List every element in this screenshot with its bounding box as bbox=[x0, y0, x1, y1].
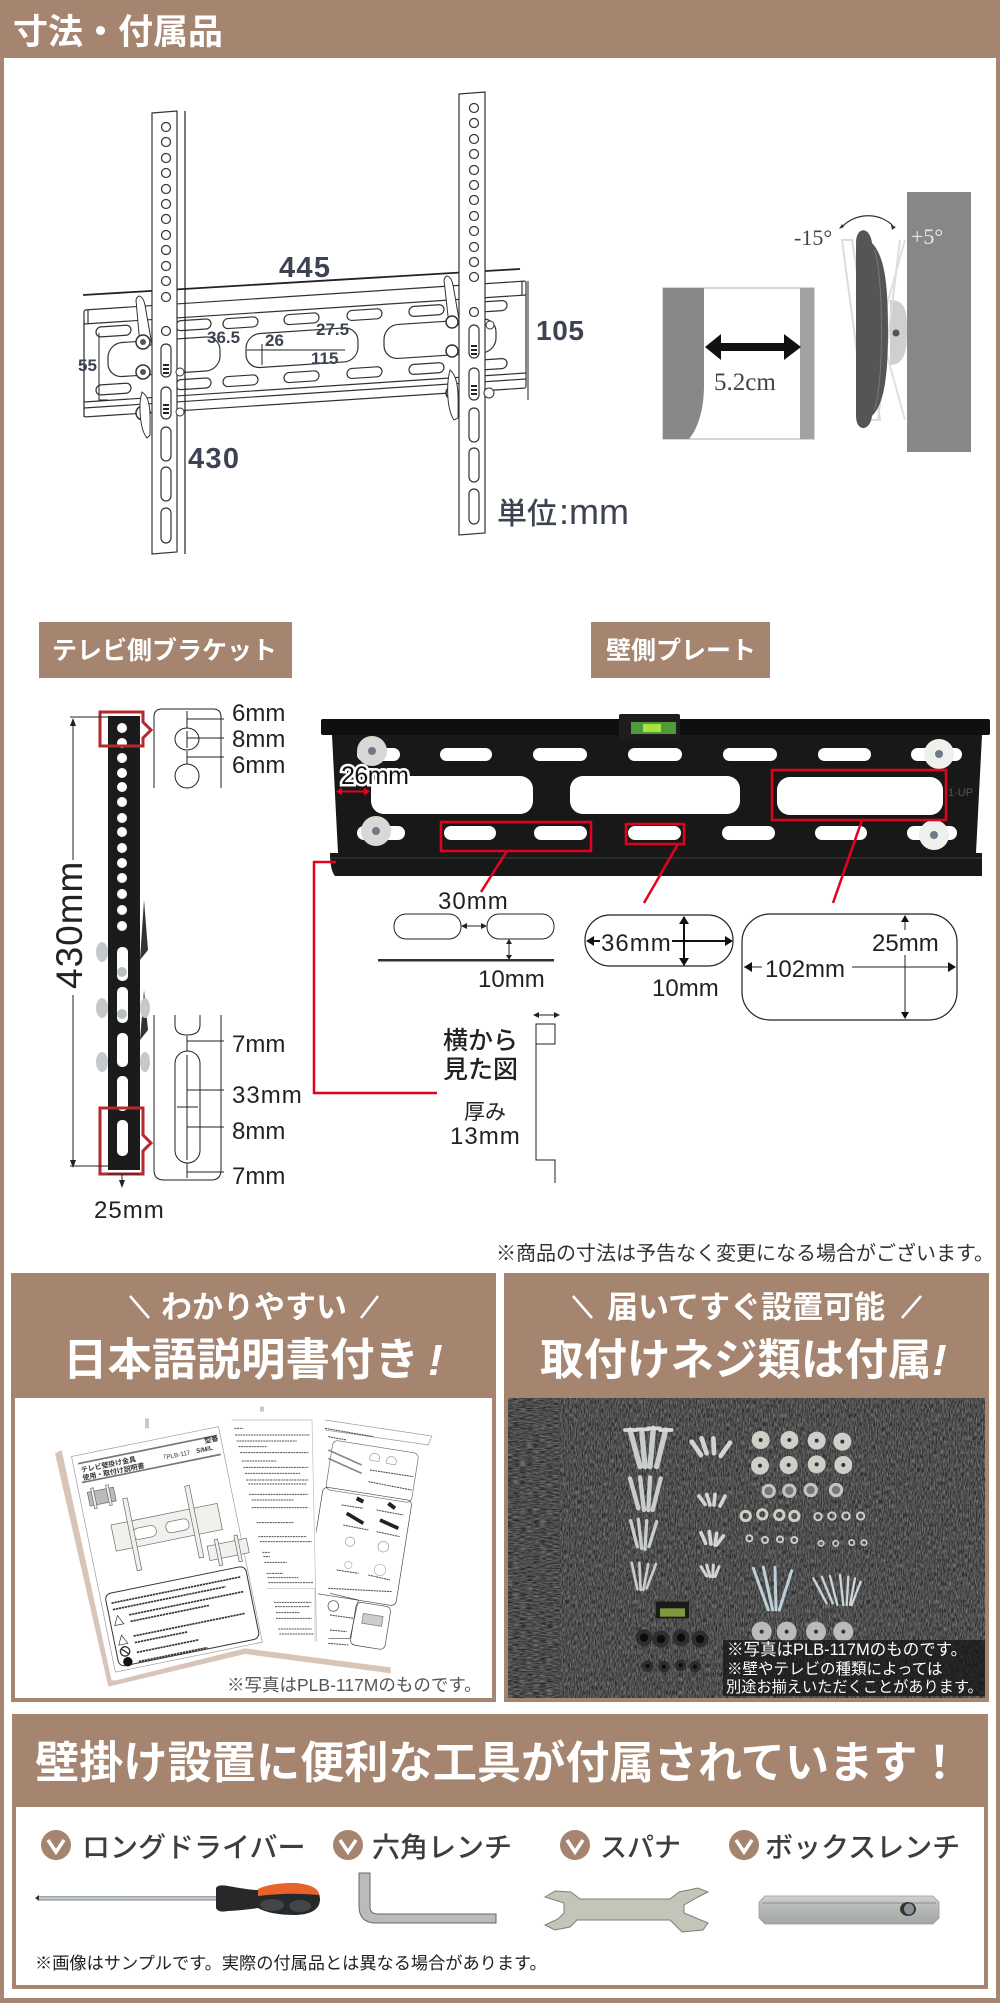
footnote: ※画像はサンプルです。実際の付属品とは異なる場合があります。 bbox=[35, 1953, 547, 1973]
manual pages illustration bbox=[55, 1407, 435, 1687]
TV-side bracket photo with dimensions: 430mm bbox=[49, 861, 90, 989]
side view: 厚み bbox=[464, 1101, 506, 1124]
bracket dimension labels: 7mm bbox=[232, 1031, 285, 1058]
photo notes bbox=[726, 1640, 983, 1696]
red highlight boxes and leaders bbox=[314, 770, 946, 1093]
heading 日本語説明書付き！: 日本語説明書付き bbox=[63, 1336, 419, 1385]
bracket dimension labels: 25mm bbox=[94, 1197, 165, 1224]
icon: spanner bbox=[545, 1888, 708, 1932]
bracket dimension labels bbox=[94, 700, 303, 1224]
right bracket bbox=[444, 92, 494, 535]
panel: screws included bbox=[504, 1273, 989, 1702]
side view: 見た図 bbox=[443, 1056, 518, 1084]
diagram: 5.2cm wall clearance bbox=[663, 288, 814, 439]
bracket photo bbox=[96, 716, 150, 1170]
bracket dimension labels: 7mm bbox=[232, 1163, 285, 1190]
bracket dimension labels: 8mm bbox=[232, 726, 285, 753]
small slot detail 30mm: 30mm bbox=[438, 888, 509, 915]
note: photo is PLB-117M: ※写真はPLB-117Mのものです。 bbox=[227, 1675, 482, 1695]
left bracket bbox=[136, 111, 184, 554]
manual pages illustration: テレビ壁掛け金具 bbox=[80, 1454, 137, 1474]
diagram: overall mount with dimensions: 27.5 bbox=[316, 320, 349, 339]
large slot detail 102mm: 25mm bbox=[872, 930, 939, 957]
dimension line and label 430mm bbox=[70, 717, 108, 1166]
bracket dimension labels: 6mm bbox=[232, 700, 285, 727]
notice: dimensions may change: ※商品の寸法は予告なく変更になる場合がございます。 bbox=[496, 1241, 994, 1265]
heading: 壁側プレート: 壁側プレート bbox=[606, 637, 756, 665]
wall plate line drawing bbox=[84, 281, 526, 417]
heading: テレビ側ブラケット bbox=[39, 622, 292, 678]
diagram: tilt angle -15 / +5: +5° bbox=[911, 224, 943, 249]
diagram: tilt angle -15 / +5: -15° bbox=[794, 225, 832, 250]
diagram: overall mount with dimensions: 36.5 bbox=[207, 328, 240, 347]
unit label: 単位 bbox=[497, 498, 557, 531]
diagram: overall mount with dimensions: 26 bbox=[265, 331, 284, 350]
dimension numbers: 445 bbox=[279, 252, 330, 284]
photo notes: ※写真はPLB-117Mのものです。 bbox=[727, 1640, 967, 1659]
diagram: overall mount with dimensions bbox=[78, 92, 584, 554]
icon: screwdriver bbox=[35, 1883, 320, 1915]
tool label: box wrench: ボックスレンチ bbox=[765, 1832, 960, 1863]
label 26mm: 26mm bbox=[341, 762, 408, 790]
large slot detail 102mm bbox=[742, 914, 957, 1020]
diagram: tilt angle -15 / +5 bbox=[794, 192, 971, 452]
heading 日本語説明書付き！: ! bbox=[428, 1336, 443, 1385]
heading 取付けネジ類は付属！: ! bbox=[932, 1336, 947, 1385]
diagram: overall mount with dimensions: 430 bbox=[188, 443, 239, 475]
manual pages illustration: 型番 bbox=[203, 1434, 219, 1445]
diagram: overall mount with dimensions: 105 bbox=[536, 315, 584, 346]
manual pages illustration: 「PLB-117 bbox=[160, 1448, 191, 1462]
bracket dimension labels: 6mm bbox=[232, 752, 285, 779]
sub-heading 届いてすぐ設置可能: 届いてすぐ設置可能 bbox=[607, 1290, 885, 1325]
diagram: 5.2cm wall clearance: 5.2cm bbox=[714, 369, 776, 396]
tool label: spanner: スパナ bbox=[600, 1833, 681, 1863]
photo notes: 別途お揃えいただくことがあります。 bbox=[726, 1679, 983, 1696]
photo notes: ※壁やテレビの種類によっては bbox=[727, 1660, 942, 1678]
oval slot detail 36mm: 10mm bbox=[652, 975, 719, 1002]
tool label: long driver: ロングドライバー bbox=[82, 1832, 305, 1863]
bracket dimension labels: 8mm bbox=[232, 1118, 285, 1145]
plate photo: 1·UP bbox=[948, 787, 973, 799]
large slot detail 102mm: 102mm bbox=[765, 956, 845, 983]
heading 取付けネジ類は付属！: 取付けネジ類は付属 bbox=[540, 1337, 932, 1385]
oval slot detail 36mm bbox=[585, 915, 733, 1002]
tool label: spanner bbox=[560, 1830, 681, 1863]
diagram: overall mount with dimensions: 55 bbox=[78, 356, 97, 375]
manual pages illustration: 使用・取付け説明書 bbox=[82, 1461, 145, 1482]
side view: 横から bbox=[443, 1027, 518, 1055]
panel: Japanese manual bbox=[11, 1273, 496, 1702]
side view: 13mm bbox=[450, 1123, 521, 1150]
small slot detail 30mm: 10mm bbox=[478, 966, 545, 993]
title: 寸法・付属品: 寸法・付属品 bbox=[13, 13, 223, 52]
width arrow bbox=[108, 1174, 140, 1186]
side view bbox=[443, 1012, 560, 1183]
diagram: overall mount with dimensions: 115 bbox=[311, 349, 338, 368]
wall plate photo with dimensions bbox=[314, 714, 990, 1183]
small slot detail 30mm bbox=[378, 888, 554, 993]
red highlight boxes bbox=[100, 712, 151, 1174]
top hole detail bbox=[154, 709, 224, 788]
dimension lines bbox=[83, 111, 528, 554]
sub-heading わかりやすい: わかりやすい bbox=[161, 1290, 347, 1325]
tool label: hex wrench: 六角レンチ bbox=[372, 1832, 512, 1863]
TV-side bracket photo with dimensions bbox=[49, 700, 303, 1224]
oval slot detail 36mm: 36mm bbox=[601, 930, 672, 957]
bottom slot detail bbox=[154, 1015, 224, 1180]
icon: box wrench bbox=[759, 1896, 939, 1924]
manual pages illustration: S/M/L bbox=[196, 1445, 214, 1455]
panel: tools included bbox=[12, 1714, 988, 1989]
unit label: :mm bbox=[559, 491, 629, 532]
plate photo bbox=[321, 714, 990, 876]
photo: screws on carpet bbox=[508, 1398, 985, 1698]
heading: 壁掛け設置に便利な工具が付属されています！ bbox=[35, 1739, 962, 1788]
icon: hex wrench bbox=[359, 1873, 496, 1923]
heading: テレビ側ブラケット: テレビ側ブラケット bbox=[52, 636, 277, 665]
heading: 壁側プレート bbox=[591, 622, 770, 678]
bracket dimension labels: 33mm bbox=[232, 1082, 303, 1109]
